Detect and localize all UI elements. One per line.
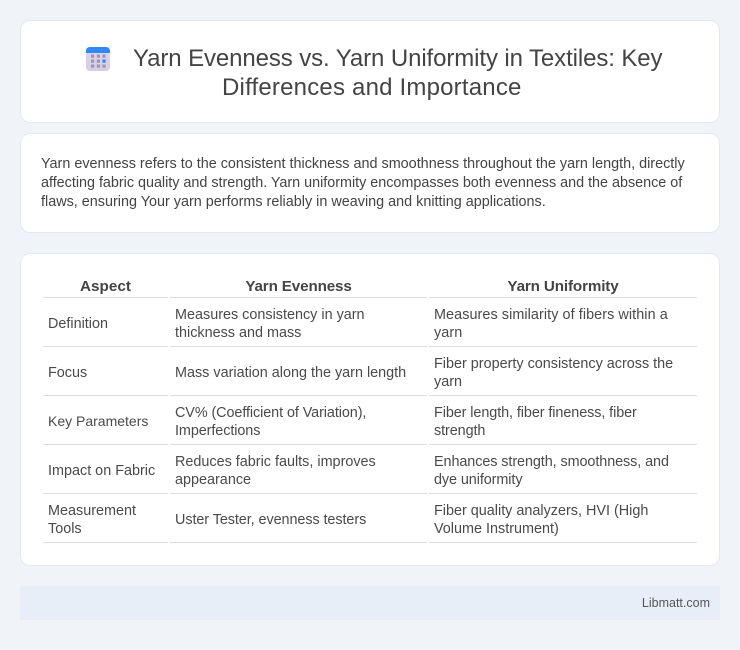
Key Parameters: uniformity bbox=[434, 405, 637, 439]
Key Parameters: uniformity: Fiber length, fiber fineness, fiber bbox=[434, 405, 637, 421]
title bbox=[133, 45, 662, 101]
Focus: evenness: Mass variation along the yarn length bbox=[175, 365, 406, 381]
Impact: evenness: Reduces fabric faults, improves bbox=[175, 454, 376, 470]
Key Parameters: evenness: Imperfections bbox=[175, 423, 260, 439]
row: Impact on Fabric: Impact on Fabric bbox=[48, 463, 155, 479]
Impact: uniformity bbox=[434, 454, 669, 488]
title: Differences and Importance bbox=[222, 74, 522, 101]
intro text: affecting fabric quality and strength. Yarn uniformity encompasses both evenness and the absence of bbox=[41, 175, 682, 191]
Focus: uniformity: yarn bbox=[434, 374, 462, 390]
Definition: evenness: thickness and mass bbox=[175, 325, 301, 341]
intro text: flaws, ensuring Your yarn performs reliably in weaving and knitting applications. bbox=[41, 194, 546, 210]
footer text: Libmatt.com bbox=[642, 596, 710, 610]
Definition: uniformity: Measures similarity of fibers within a bbox=[434, 307, 668, 323]
Focus: uniformity: Fiber property consistency across the bbox=[434, 356, 673, 372]
comparison table bbox=[43, 278, 697, 543]
title card bbox=[20, 20, 720, 123]
intro card bbox=[20, 133, 720, 233]
row: Measurement Tools: Tools bbox=[48, 521, 82, 537]
row: Focus: Focus bbox=[48, 365, 87, 381]
header: Yarn Uniformity: Yarn Uniformity bbox=[507, 278, 619, 295]
Key Parameters: evenness: CV% (Coefficient of Variation), bbox=[175, 405, 366, 421]
Tools: evenness: Uster Tester, evenness testers bbox=[175, 512, 366, 528]
row: Definition: Definition bbox=[48, 316, 108, 332]
header: Aspect: Aspect bbox=[80, 278, 131, 295]
Impact: evenness bbox=[175, 454, 376, 488]
Definition: uniformity: yarn bbox=[434, 325, 462, 341]
Impact: uniformity: Enhances strength, smoothness, and bbox=[434, 454, 669, 470]
Tools: uniformity: Volume Instrument) bbox=[434, 521, 559, 537]
header: Yarn Evenness: Yarn Evenness bbox=[245, 278, 352, 295]
row: Measurement Tools bbox=[48, 503, 136, 537]
icon: calendar bbox=[86, 47, 110, 71]
intro text: Yarn evenness refers to the consistent thickness and smoothness throughout the yarn length, directly bbox=[41, 156, 685, 172]
Tools: uniformity: Fiber quality analyzers, HVI (High bbox=[434, 503, 648, 519]
Impact: evenness: appearance bbox=[175, 472, 251, 488]
intro text bbox=[41, 156, 685, 210]
row: Key Parameters: Key Parameters bbox=[48, 413, 148, 429]
Tools: uniformity bbox=[434, 503, 648, 537]
Focus: uniformity bbox=[434, 356, 673, 390]
Key Parameters: evenness bbox=[175, 405, 366, 439]
title: Yarn Evenness vs. Yarn Uniformity in Textiles: Key bbox=[133, 45, 662, 72]
Key Parameters: uniformity: strength bbox=[434, 423, 485, 439]
Definition: uniformity bbox=[434, 307, 668, 341]
Definition: evenness: Measures consistency in yarn bbox=[175, 307, 365, 323]
table card bbox=[20, 253, 720, 566]
Definition: evenness bbox=[175, 307, 365, 341]
footer bar bbox=[20, 586, 720, 620]
Impact: uniformity: dye uniformity bbox=[434, 472, 522, 488]
row: Measurement Tools: Measurement bbox=[48, 503, 136, 519]
